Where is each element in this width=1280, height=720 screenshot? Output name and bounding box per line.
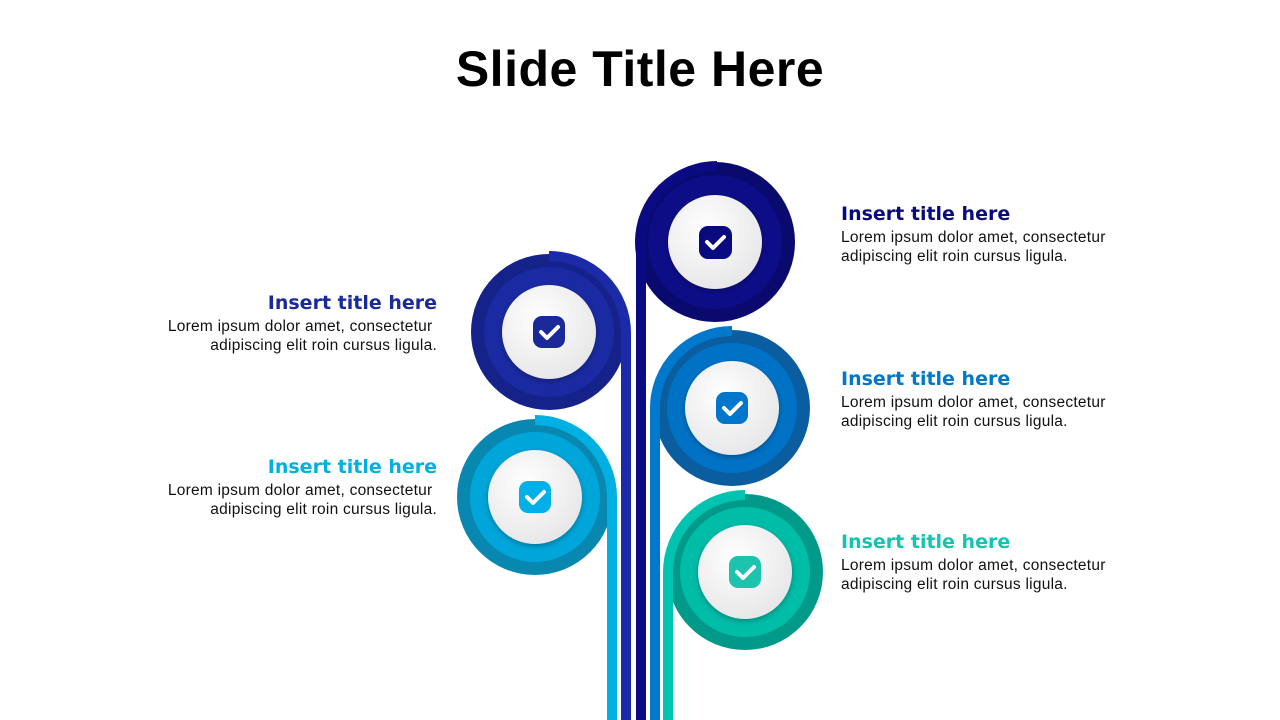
text: item 5: Insert title here <box>841 531 1010 553</box>
text: item 4: Lorem ipsum dolor amet, consectetur <box>841 394 1106 411</box>
item 2 circle blue <box>471 254 627 720</box>
text: item 1: Insert title here <box>841 203 1010 225</box>
title: Slide Title Here <box>456 41 824 97</box>
text: item 2: Lorem ipsum dolor amet, consectetur <box>168 318 432 335</box>
text: item 3: Lorem ipsum dolor amet, consectetur <box>168 482 432 499</box>
text: item 4: adipiscing elit roin cursus ligula. <box>841 413 1068 430</box>
text: item 5 <box>841 531 1106 593</box>
text: item 2: Insert title here <box>268 292 437 314</box>
text: item 3: adipiscing elit roin cursus ligula. <box>210 501 437 518</box>
text: item 5: Lorem ipsum dolor amet, consectetur <box>841 557 1106 574</box>
text: item 1: Lorem ipsum dolor amet, consectetur <box>841 229 1106 246</box>
text: item 1 <box>841 203 1106 265</box>
text: item 3: Insert title here <box>268 456 437 478</box>
item 4 circle mid blue <box>654 330 810 720</box>
text: item 4 <box>841 368 1106 430</box>
text: item 5: adipiscing elit roin cursus ligula. <box>841 576 1068 593</box>
text: item 2: adipiscing elit roin cursus ligula. <box>210 337 437 354</box>
text: item 4: Insert title here <box>841 368 1010 390</box>
text: item 3 <box>168 456 437 518</box>
item 1 circle navy <box>635 162 795 720</box>
item 3 circle cyan <box>457 419 613 720</box>
item 5 circle teal <box>667 494 823 720</box>
text: item 1: adipiscing elit roin cursus ligula. <box>841 248 1068 265</box>
text: item 2 <box>168 292 437 354</box>
